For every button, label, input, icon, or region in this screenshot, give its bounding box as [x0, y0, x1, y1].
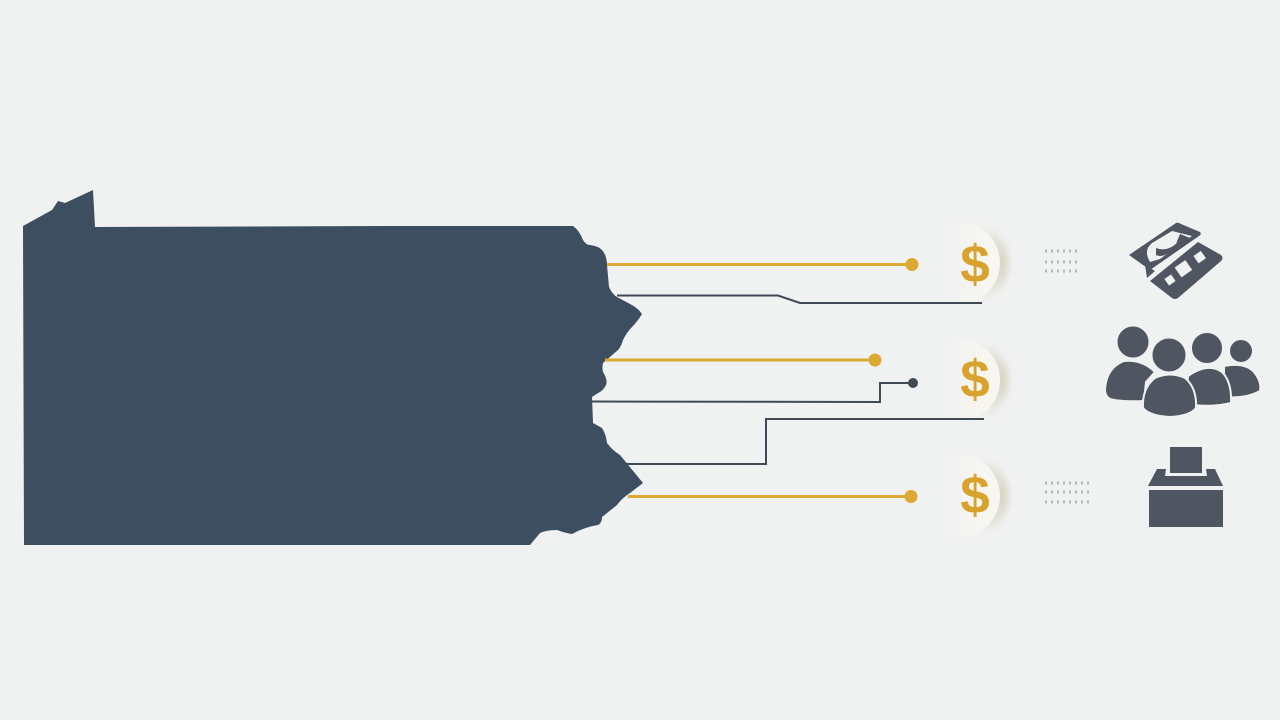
connector: dark line 3: [625, 419, 984, 464]
icon: group of people: [1105, 326, 1260, 417]
connector: gold line 1: [607, 258, 918, 271]
illegible label 3: [1045, 483, 1090, 502]
connector: dark line 1: [617, 296, 982, 303]
connector: gold line 3: [628, 490, 918, 503]
illegible label 1: [1045, 251, 1081, 271]
icon: money and ticket: [1129, 223, 1222, 299]
coin 2: [918, 338, 1007, 422]
coin 2: $: [960, 350, 990, 409]
icon: ballot box: [1148, 447, 1223, 527]
coin 1: [918, 221, 1007, 305]
connector: dark line 2: [592, 378, 918, 402]
connector: gold line 2: [605, 354, 882, 366]
coin 1: $: [960, 235, 990, 294]
coin 3: [918, 454, 1007, 538]
coin 3: $: [960, 466, 990, 525]
map: Pennsylvania silhouette: [23, 190, 643, 545]
